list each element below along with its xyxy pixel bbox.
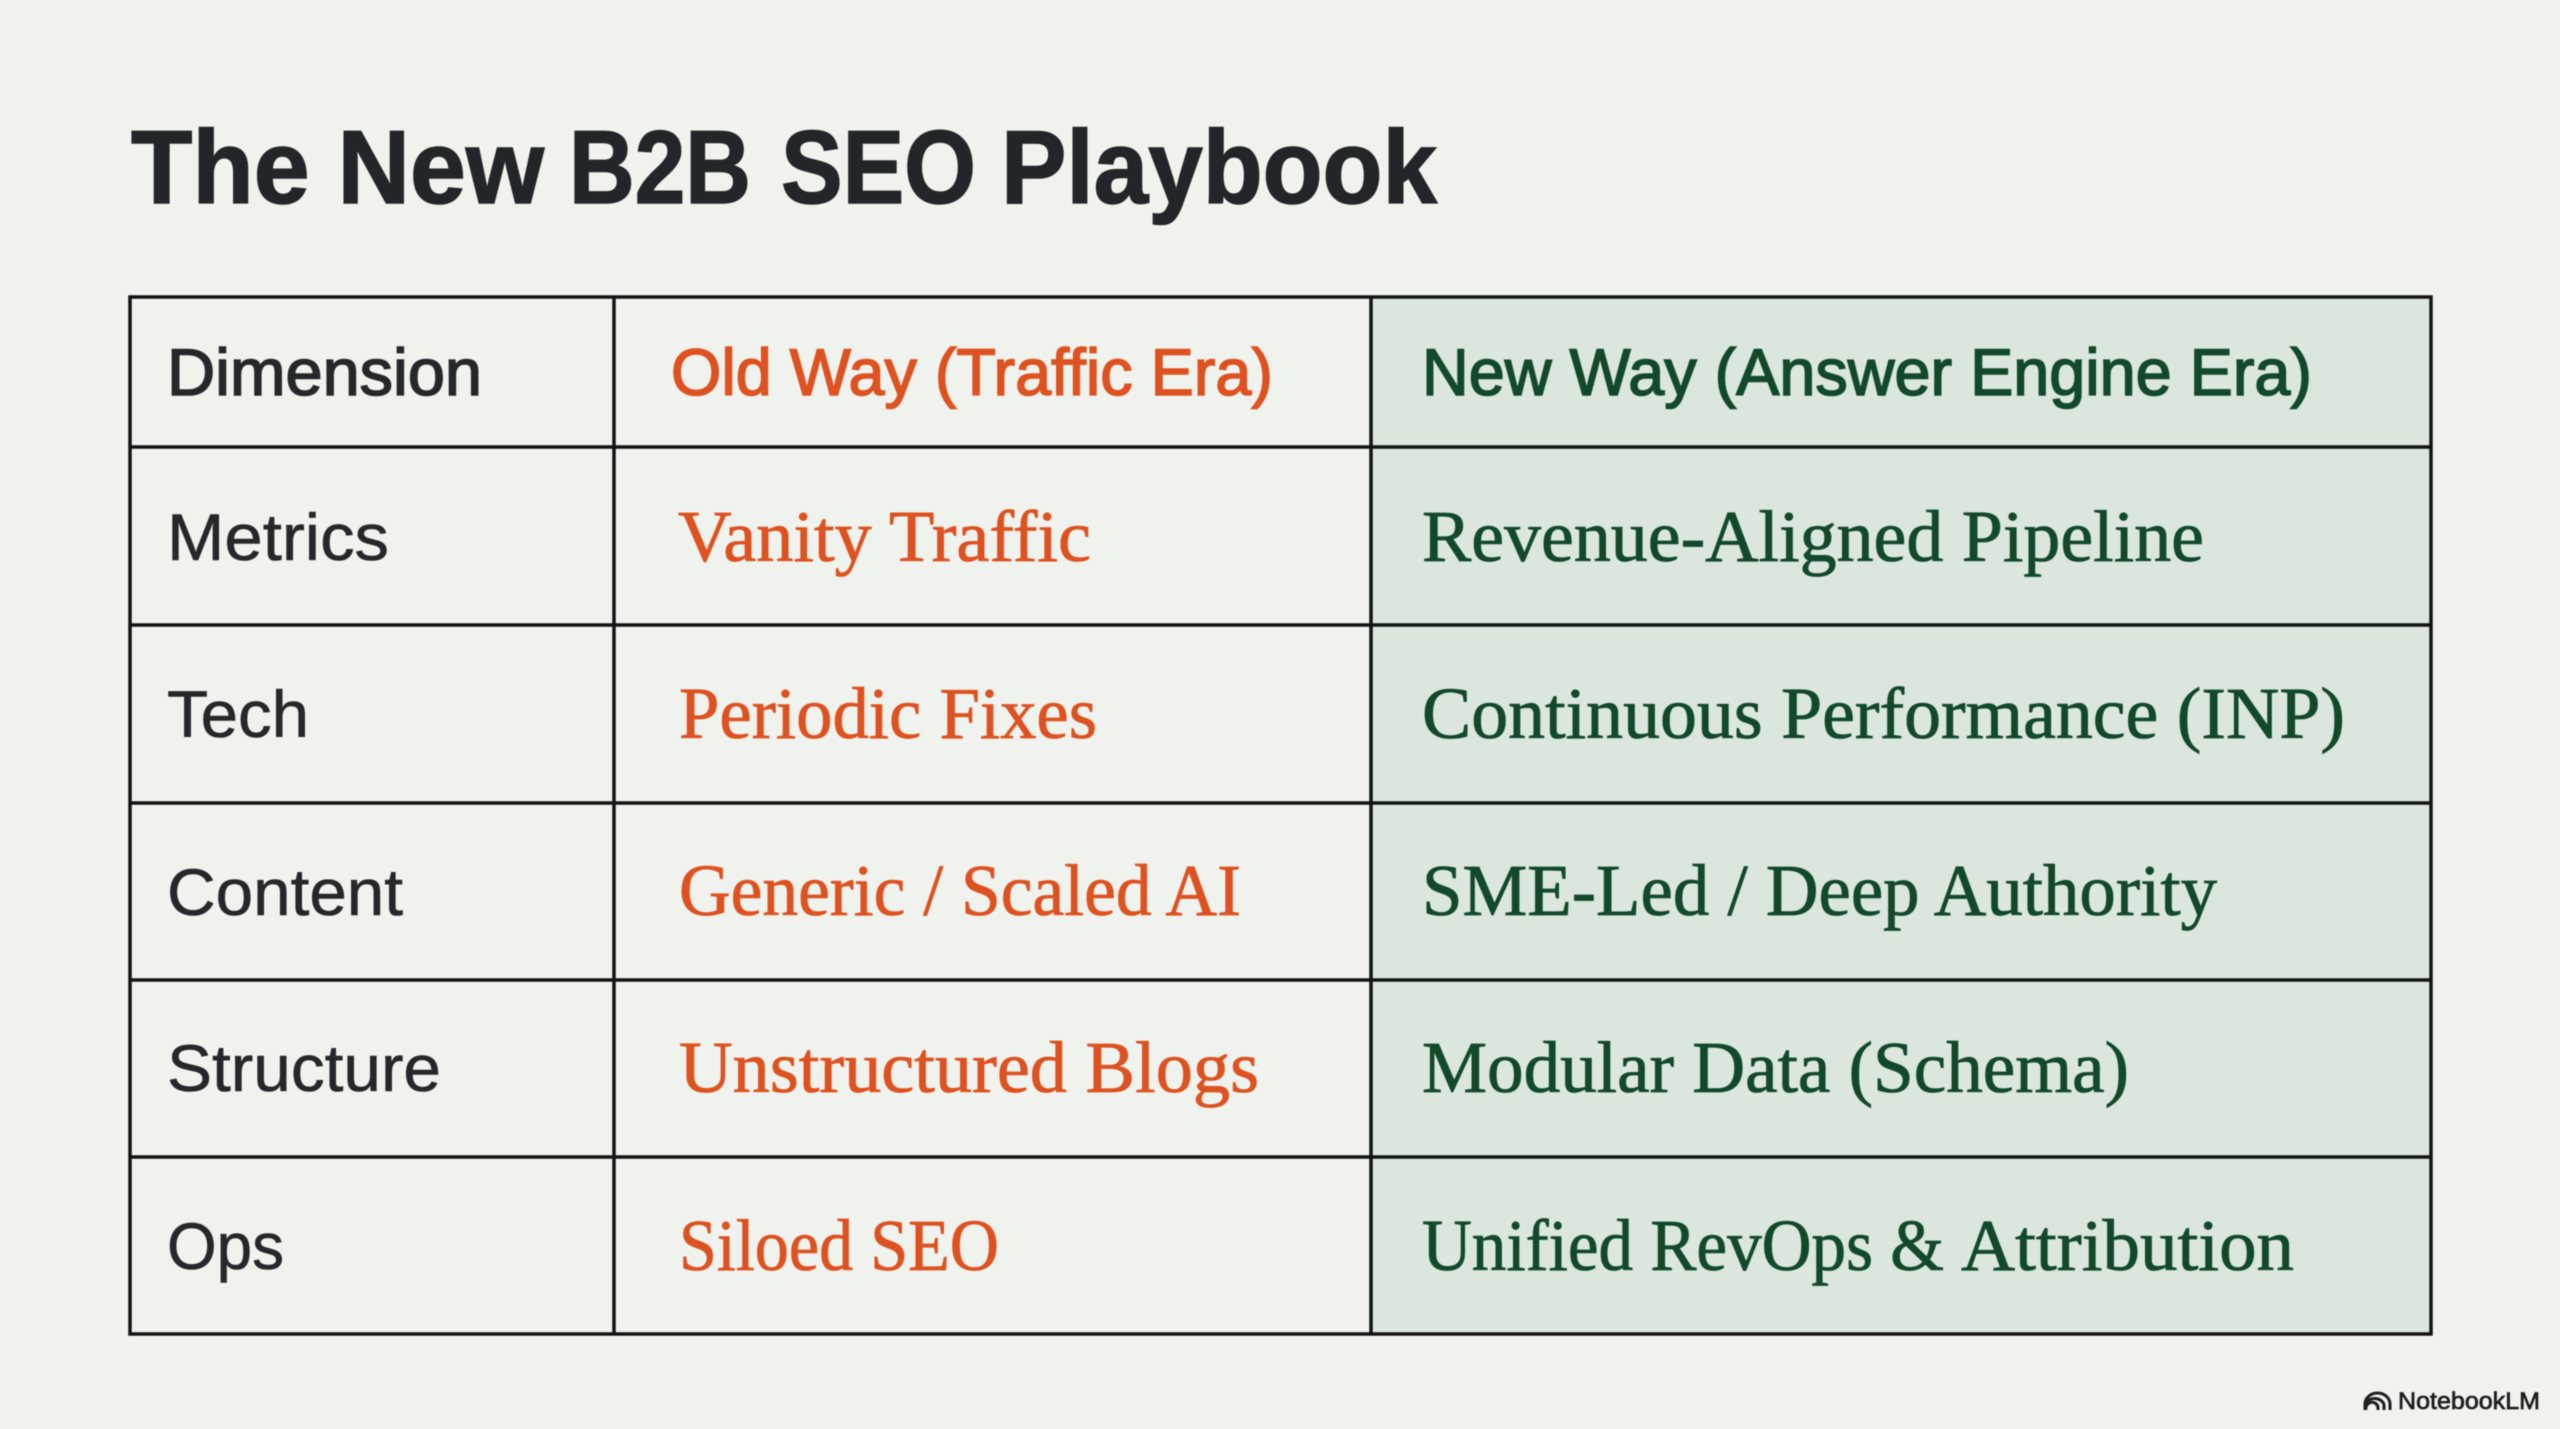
- row: ops: Unified RevOps &: [1422, 1205, 1944, 1286]
- header row: [167, 335, 2312, 409]
- row: tech: Continuous Performance (INP): [1422, 673, 2345, 754]
- row: structure: [167, 1027, 2129, 1108]
- row: tech: Tech: [167, 677, 309, 751]
- header row: Old Way (Traffic Era): [671, 335, 1273, 409]
- row: metrics: Revenue-Aligned Pipeline: [1422, 496, 2204, 577]
- row: content: Content: [167, 855, 403, 929]
- column highlight: new way: [1371, 297, 2431, 1334]
- title: [131, 110, 1437, 226]
- row: ops: [167, 1205, 2294, 1286]
- row: tech: [167, 673, 2345, 754]
- icon: NotebookLM logo: [2365, 1393, 2390, 1410]
- row: structure: Modular Data (Schema): [1422, 1027, 2129, 1108]
- title: B2B: [569, 110, 751, 226]
- row: content: [167, 850, 2217, 931]
- table grid: [130, 297, 2431, 1334]
- row: tech: Periodic Fixes: [679, 673, 1097, 754]
- header row: New Way (Answer Engine Era): [1422, 335, 2312, 409]
- row: structure: Unstructured Blogs: [679, 1027, 1259, 1108]
- table: old vs new comparison: [130, 297, 2431, 1334]
- row: content: Generic / Scaled AI: [679, 850, 1241, 931]
- row: structure: Structure: [167, 1031, 441, 1105]
- row: metrics: [167, 496, 2204, 577]
- header row: Dimension: [167, 335, 482, 409]
- row: ops: Attribution: [1961, 1205, 2294, 1286]
- NotebookLM watermark: NotebookLM: [2398, 1388, 2540, 1415]
- title: SEO: [781, 110, 976, 226]
- row: ops: Siloed SEO: [679, 1205, 999, 1286]
- title: The New: [131, 110, 545, 226]
- row: ops: Ops: [167, 1209, 284, 1283]
- title: Playbook: [1001, 110, 1437, 226]
- row: metrics: Metrics: [167, 500, 389, 574]
- row: content: SME-Led / Deep Authority: [1422, 850, 2217, 931]
- row: metrics: Vanity Traffic: [678, 496, 1091, 577]
